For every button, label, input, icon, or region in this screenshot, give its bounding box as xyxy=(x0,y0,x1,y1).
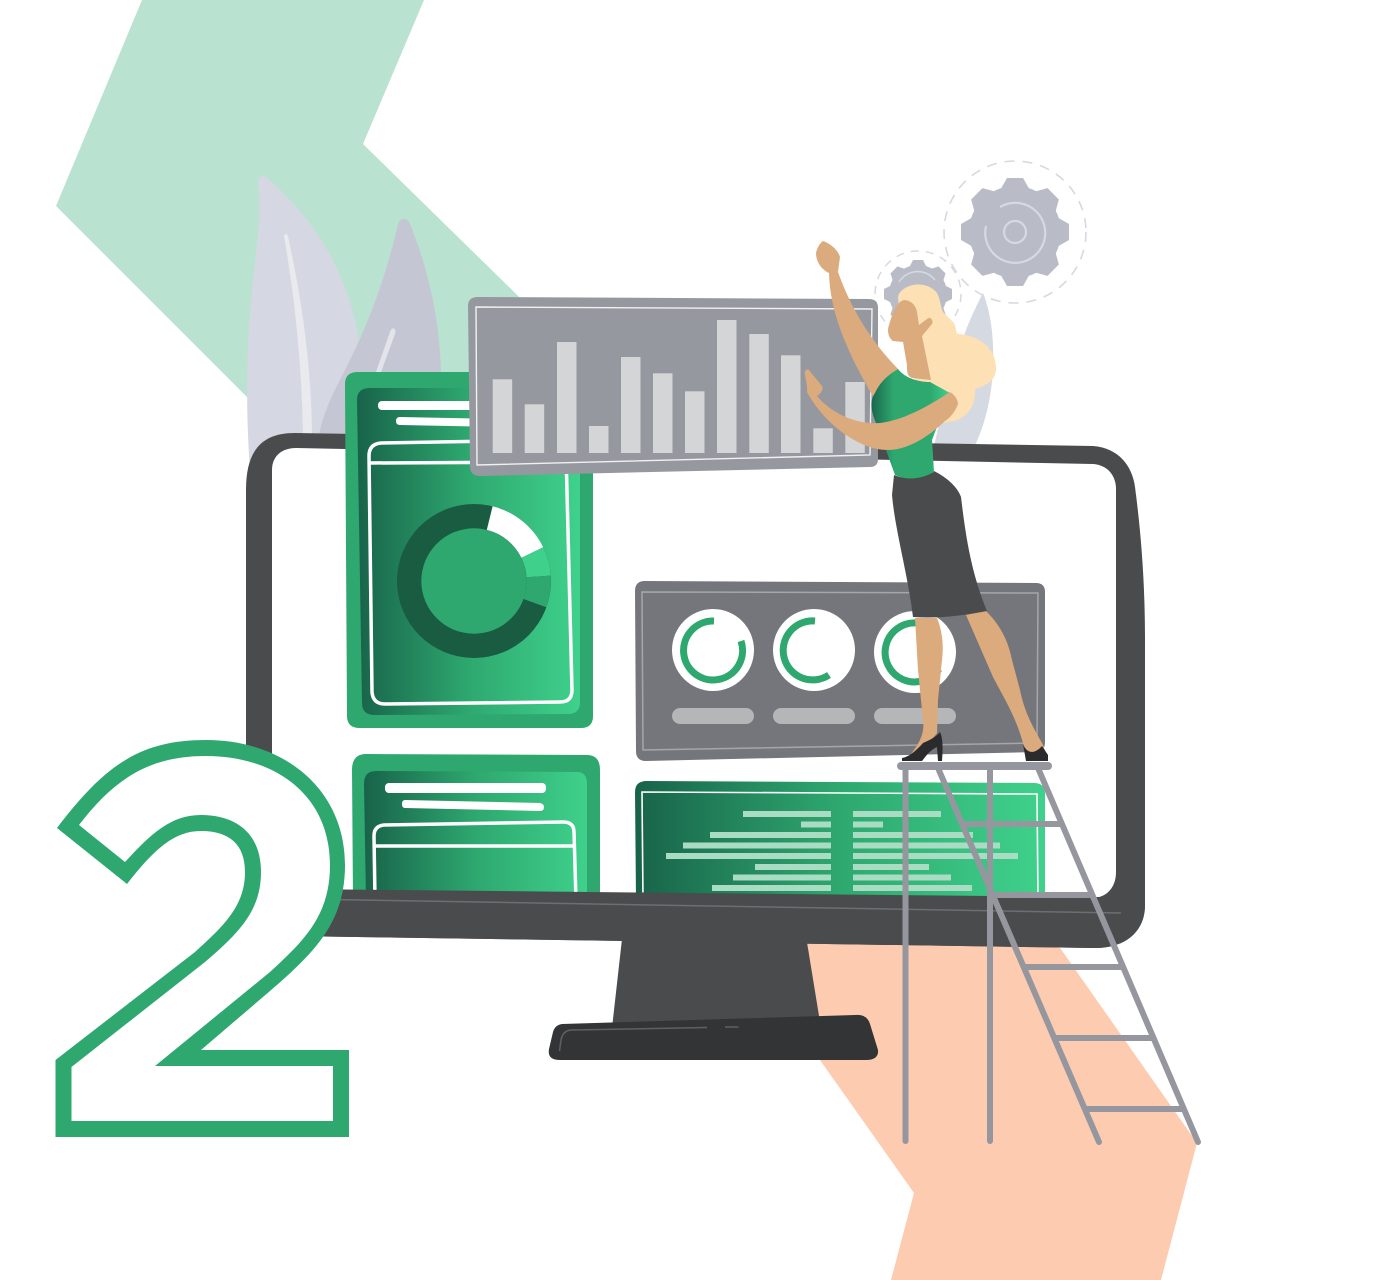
leaf vein: darker rear xyxy=(376,328,395,372)
shoe: back xyxy=(1023,744,1048,761)
card background xyxy=(352,754,600,900)
shoe: front xyxy=(902,732,943,761)
panel: bar chart xyxy=(468,297,878,476)
donut chart xyxy=(397,504,551,658)
panel frame xyxy=(476,307,872,465)
icon: large gear xyxy=(944,161,1086,303)
background shape: mint chevron xyxy=(56,0,560,450)
panel: donut chart card xyxy=(345,372,593,728)
gauge 3 xyxy=(874,611,956,693)
ladder rungs xyxy=(961,824,1183,1109)
bars xyxy=(493,320,865,453)
gauge 1 xyxy=(672,609,754,691)
inner frame xyxy=(369,440,572,704)
face and neck xyxy=(888,300,933,380)
monitor stand base xyxy=(549,1015,878,1060)
panel: code list xyxy=(635,781,1045,900)
monitor frame xyxy=(246,433,1145,948)
panel: gauges xyxy=(635,581,1045,761)
leaf: tall light xyxy=(247,176,362,470)
card gradient inset xyxy=(357,388,580,715)
background shape: peach chevron xyxy=(807,940,1197,1280)
panel: lower left card xyxy=(352,754,600,900)
figure: woman adjusting dashboard xyxy=(805,241,1048,761)
ladder rails xyxy=(938,768,1198,1142)
panel frame xyxy=(642,592,1038,750)
leaf vein: tall light xyxy=(284,234,312,440)
monitor bottom bezel xyxy=(290,889,1145,948)
right column lines xyxy=(853,811,1018,891)
monitor stand neck xyxy=(612,930,820,1028)
ladder platform top xyxy=(897,762,1052,770)
number 2 outline xyxy=(56,740,349,1137)
card gradient inset xyxy=(364,771,587,900)
bezel highlight xyxy=(330,900,1121,913)
inner frame xyxy=(374,822,576,900)
gauge 2 xyxy=(773,609,855,691)
ladder platform structure xyxy=(906,768,1198,1142)
hair xyxy=(898,284,996,425)
heading lines xyxy=(385,783,546,811)
panel background xyxy=(635,781,1045,900)
leaf: darker rear xyxy=(318,219,441,440)
left column lines xyxy=(666,811,831,891)
torso xyxy=(871,369,950,478)
heading lines xyxy=(378,401,500,427)
front leg xyxy=(910,618,943,755)
ladder uprights xyxy=(906,768,990,1141)
left plant leaves xyxy=(247,176,441,470)
icon: small gear xyxy=(875,251,961,337)
card background xyxy=(345,372,593,728)
skirt xyxy=(892,471,987,618)
panel frame xyxy=(642,792,1038,900)
raised arm xyxy=(816,241,898,400)
monitor screen xyxy=(272,448,1116,898)
panel background xyxy=(635,581,1045,761)
gauge labels xyxy=(672,708,956,724)
right plant leaf xyxy=(933,293,993,450)
front arm xyxy=(805,369,958,450)
back leg xyxy=(966,611,1047,756)
panel background xyxy=(468,297,878,476)
